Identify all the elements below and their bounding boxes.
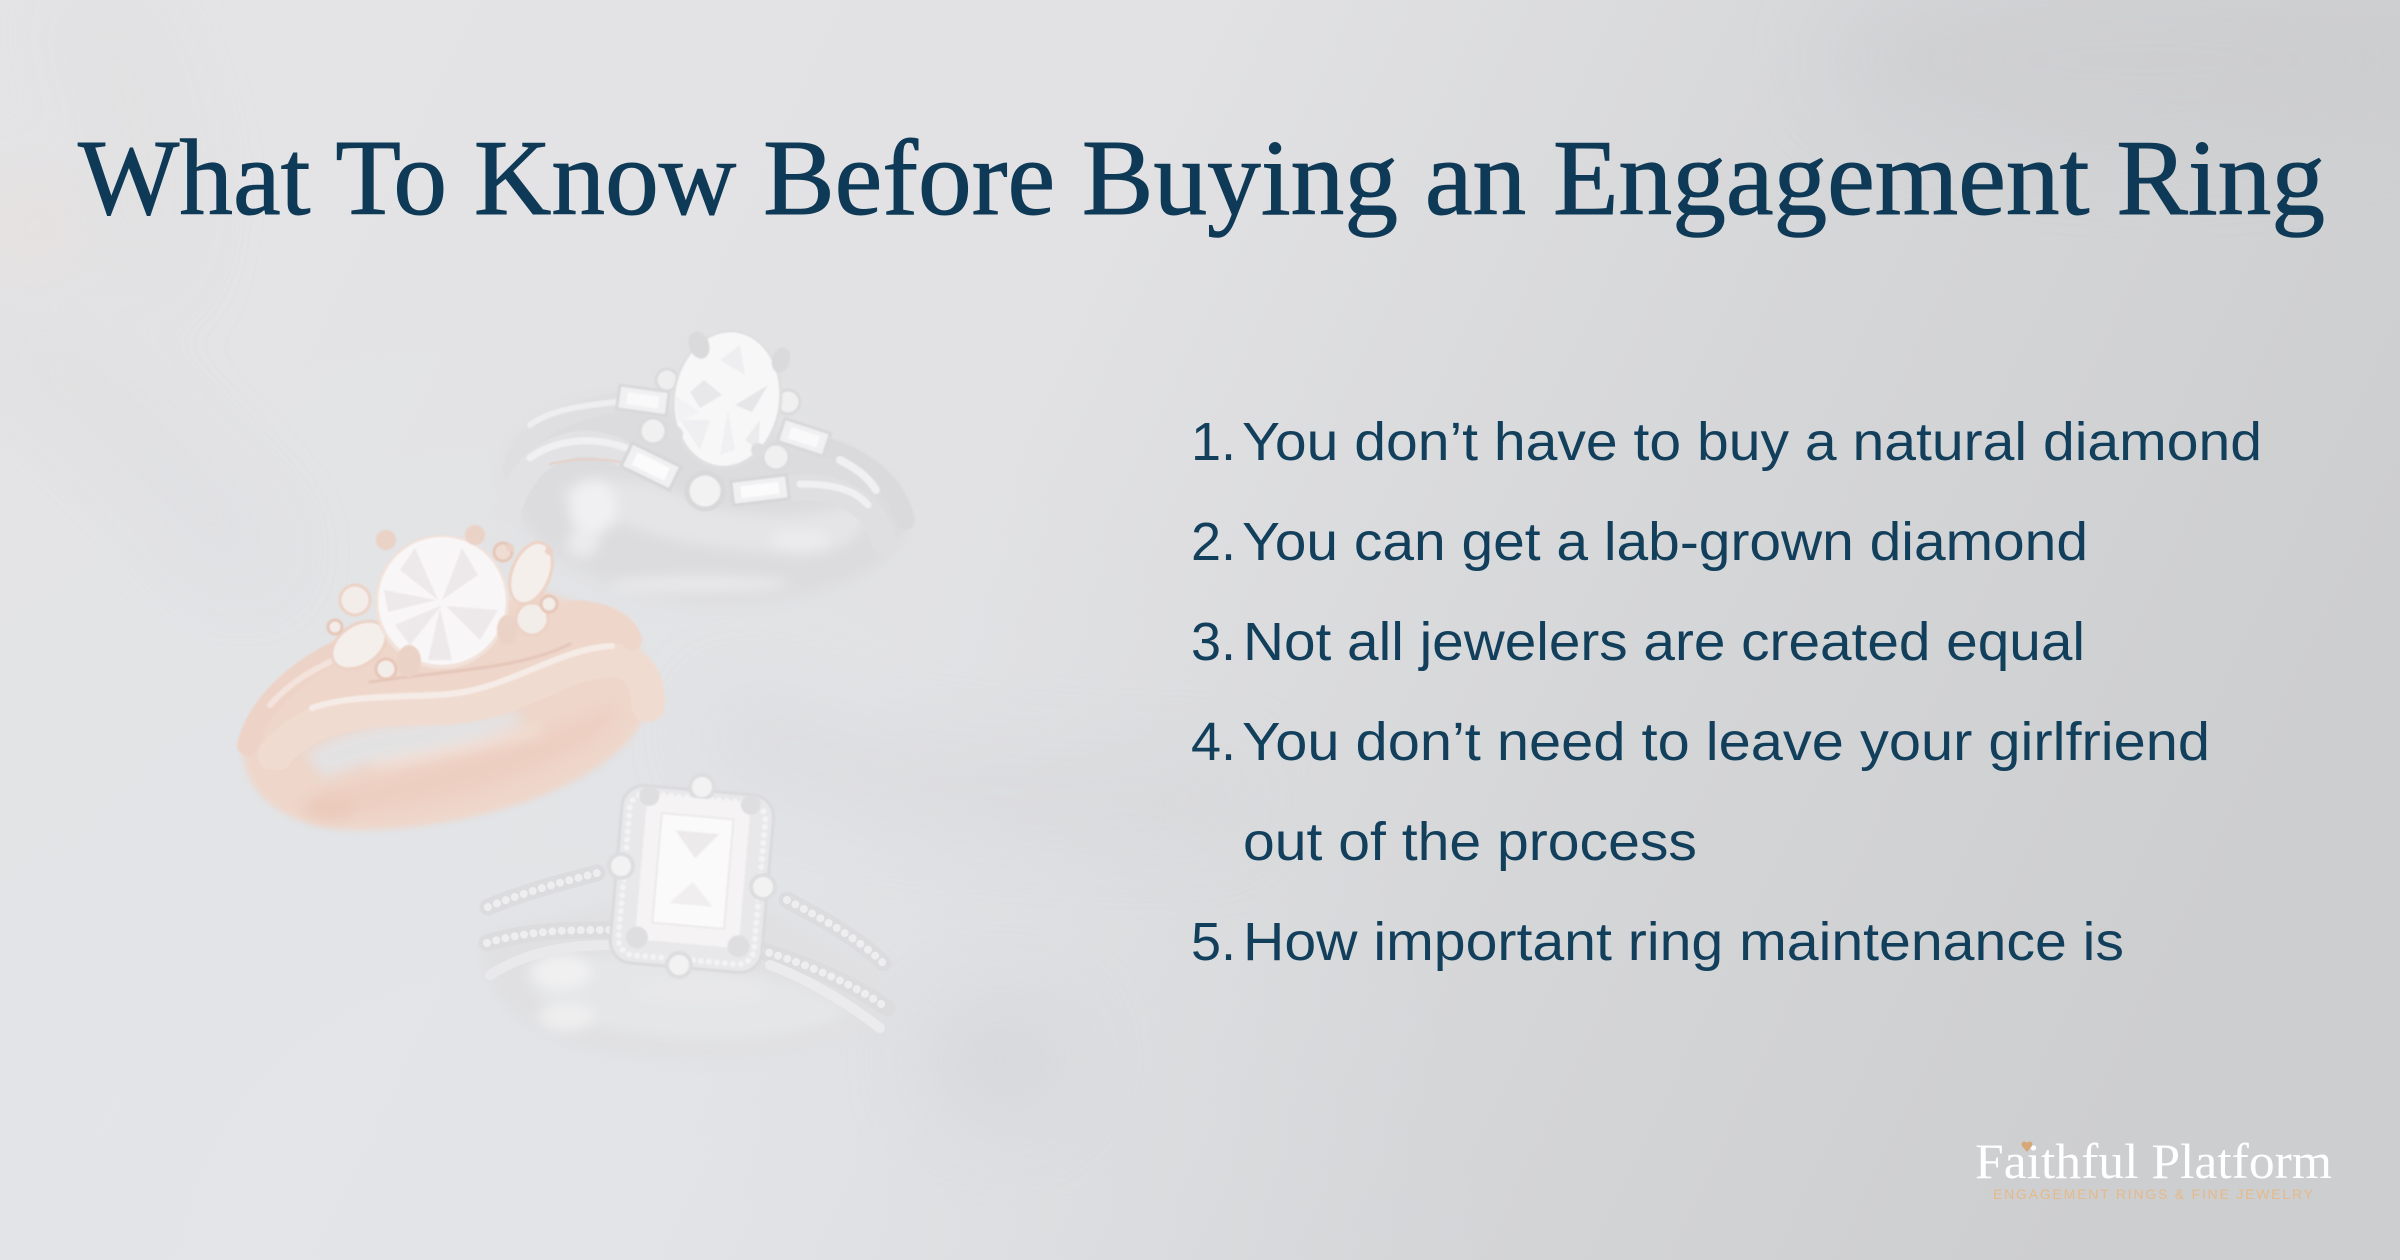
- engagement and wedding bands: [508, 402, 905, 540]
- inner band gradient patches: [304, 705, 616, 820]
- item 4: out of the process: [1243, 812, 1697, 872]
- item 4: You don’t need to leave your girlfriend: [1242, 712, 2210, 772]
- item 2: You can get a lab-grown diamond: [1242, 512, 2088, 572]
- item 1: 1.: [1191, 412, 1236, 472]
- item 4: [1191, 712, 2210, 872]
- title: What To Know Before Buying an Engagement Ring: [78, 119, 2325, 238]
- icon: heart: [2022, 1142, 2032, 1152]
- emerald-cut center diamond: [625, 785, 763, 958]
- logo wordmark: Faithful Platform: [1975, 1133, 2332, 1189]
- ring body and inner shadow: [243, 590, 650, 830]
- beaded bands: [487, 873, 887, 1028]
- halo and accent stones: [608, 775, 775, 977]
- ring: white gold emerald-cut diamond set: [483, 775, 887, 1061]
- ring: rose gold round diamond set: [243, 525, 650, 830]
- item 3: Not all jewelers are created equal: [1243, 612, 2085, 672]
- ring body and inner shadow: [506, 398, 907, 604]
- item 5: 5.: [1191, 912, 1236, 972]
- side stones: baguettes and round accents: [617, 369, 830, 509]
- item 3: 3.: [1191, 612, 1236, 672]
- item 4: 4.: [1191, 712, 1236, 772]
- ring body and inner shadow: [483, 905, 887, 1061]
- logo: Faithful Platform: [1975, 1133, 2332, 1202]
- item 1: You don’t have to buy a natural diamond: [1242, 412, 2262, 472]
- numbered list: [1191, 412, 2262, 972]
- logo tagline: ENGAGEMENT RINGS & FINE JEWELRY: [1993, 1186, 2314, 1202]
- round center diamond: [375, 525, 553, 677]
- item 5: How important ring maintenance is: [1243, 912, 2124, 972]
- oval center diamond: [663, 323, 793, 477]
- ring: white gold oval diamond set: [506, 323, 907, 604]
- item 2: 2.: [1191, 512, 1236, 572]
- engagement and wedding bands: [248, 610, 648, 755]
- side stones: [323, 536, 561, 679]
